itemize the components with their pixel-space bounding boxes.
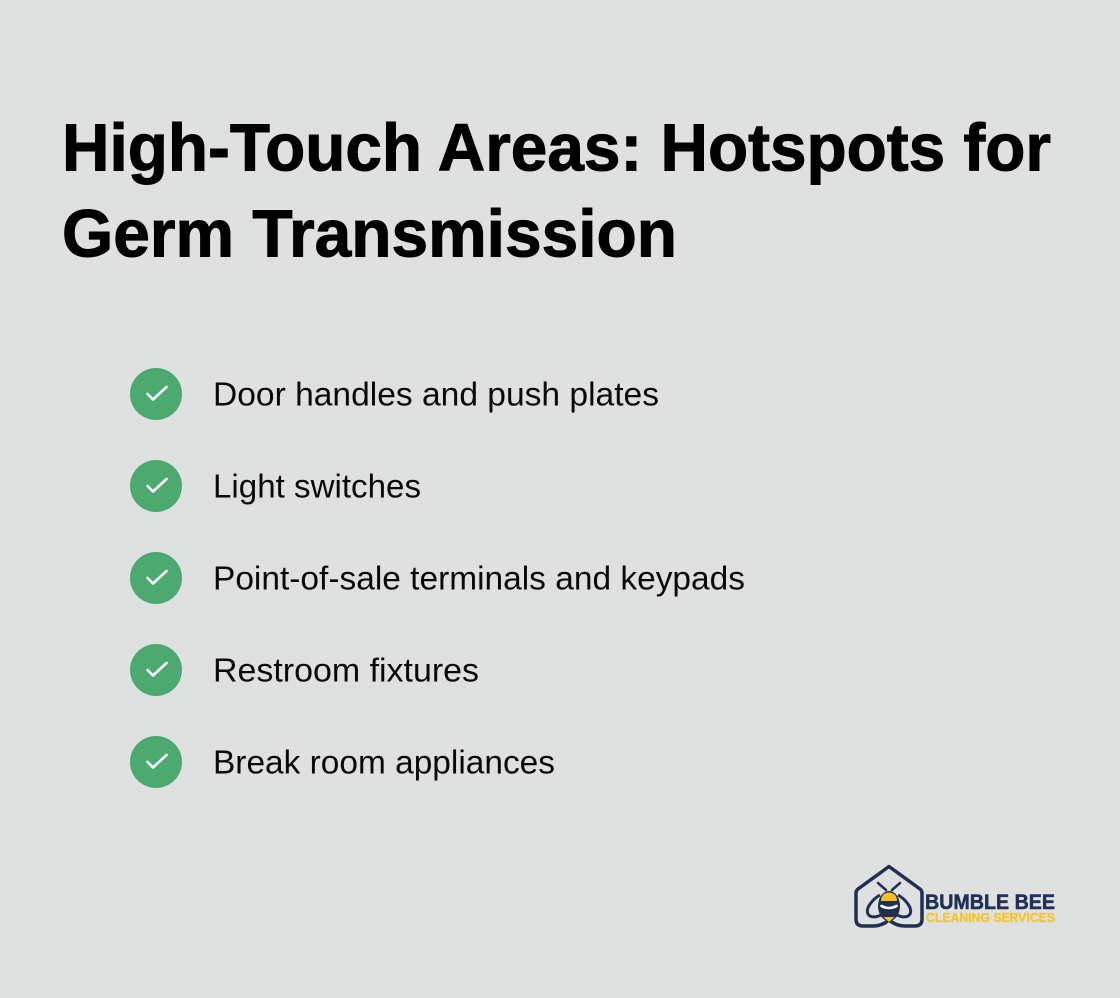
list item: door handles <box>130 368 659 420</box>
list item: door handles: Door handles and push plates <box>213 376 659 412</box>
list item: break room appliances: Break room appliances <box>213 744 555 780</box>
title: High-Touch Areas: Hotspots for <box>62 110 1051 186</box>
list item: break room appliances <box>130 736 555 788</box>
checklist <box>130 368 745 788</box>
title <box>62 110 1051 272</box>
title: Germ Transmission <box>62 196 677 272</box>
logo: Bumble Bee Cleaning Services <box>856 866 1055 926</box>
list item: light switches <box>130 460 421 512</box>
logo wordmark: BUMBLE BEE <box>925 891 1055 914</box>
list item: restroom fixtures <box>130 644 479 696</box>
list item: point-of-sale terminals <box>130 552 745 604</box>
list item: point-of-sale terminals: Point-of-sale terminals and keypads <box>213 560 745 596</box>
list item: light switches: Light switches <box>213 468 421 504</box>
logo tagline: CLEANING SERVICES <box>926 911 1055 925</box>
icon: house with bee <box>856 866 922 926</box>
list item: restroom fixtures: Restroom fixtures <box>213 652 479 688</box>
